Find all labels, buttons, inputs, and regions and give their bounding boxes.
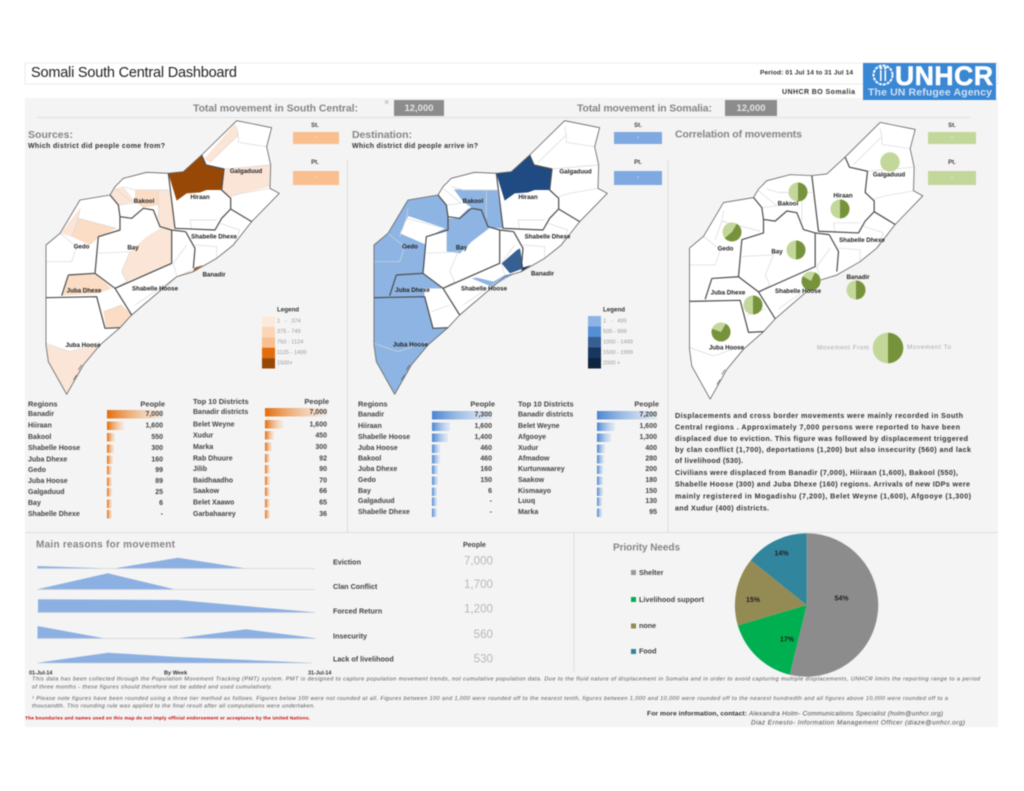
footnotes: thousandth. This rounding rule was applied to the final result after all computations were undertaken. [32, 704, 315, 710]
table: destination districts: Afgooye [518, 434, 546, 441]
table: source districts: 1,600 [309, 422, 327, 428]
narrative text block: of livelihood (530). [675, 456, 743, 465]
table: destination regions: - [490, 509, 493, 516]
table: source regions: 6 [159, 500, 163, 507]
sources St. and Pt. boxes: Pt. [311, 160, 319, 166]
table: destination districts: Xudur [518, 445, 538, 452]
sources St. and Pt. boxes [293, 123, 339, 185]
sources map labels: Shabelle Dhexe [191, 234, 237, 240]
priority needs pie chart: 54% [834, 596, 849, 602]
destination legend [588, 306, 633, 368]
destination heading: Destination: [352, 129, 412, 141]
destination map labels [393, 168, 592, 348]
sources map labels: Juba Dhexe [67, 288, 102, 294]
table: destination districts: 400 [645, 445, 657, 452]
sparkline areas [37, 558, 317, 663]
destination map labels: Juba Dhexe [395, 287, 430, 294]
table: source regions: Galgaduud [28, 489, 65, 496]
destination map labels: Bay [456, 244, 468, 252]
reason labels and values: Forced Return [333, 606, 382, 616]
destination map labels: Juba Hoose [393, 342, 429, 348]
destination map labels: Gedo [402, 244, 418, 250]
map disclaimer: The boundaries and names used on this map do not imply official endorsement or acceptance by the United Nations. [25, 716, 310, 722]
correlation map labels: Juba Hoose [709, 344, 745, 352]
reasons heading: Main reasons for movement [36, 540, 176, 550]
table: source districts: Banadir districts [193, 409, 248, 416]
contact information: Alexandra Holm- Communications Specialist (holm@unhcr.org) [748, 710, 943, 718]
sparkline axis labels: By Week [164, 670, 188, 676]
contact information [647, 710, 965, 726]
narrative text block: Civilians were displaced from Banadir (7,000), Hiiraan (1,600), Bakool (550), [675, 468, 958, 477]
table: source districts: 7,000 [309, 409, 327, 416]
table: source districts: People [304, 397, 329, 406]
reason labels and values: Insecurity [333, 632, 367, 640]
correlation heading: Correlation of movements [675, 128, 802, 140]
destination legend: Legend [603, 306, 625, 314]
table: source regions: Gedo [28, 467, 46, 474]
table: destination regions: Bay [358, 488, 371, 495]
table: destination districts: 150 [645, 488, 657, 495]
table: source districts: 65 [319, 500, 327, 506]
sources legend: Legend [277, 306, 299, 314]
correlation map labels: Gedo [718, 246, 734, 252]
correlation map [689, 122, 923, 399]
correlation St. and Pt. boxes: Pt. [948, 160, 956, 166]
table: source districts: 450 [315, 432, 327, 440]
table: destination regions: Hiiraan [358, 423, 382, 430]
table: destination districts [518, 400, 659, 517]
priority needs heading: Priority Needs [613, 542, 680, 554]
sources map labels: Hiraan [190, 194, 210, 201]
sources heading: Which district did people come from? [28, 143, 165, 150]
table: source regions: 550 [151, 434, 163, 441]
table: source regions: 89 [155, 478, 163, 485]
reason labels and values: 1,200 [464, 602, 493, 616]
correlation St. and Pt. boxes: St. [948, 123, 956, 129]
table: destination regions: Galgaduud [358, 498, 395, 505]
table: source regions: Bakool [28, 434, 51, 441]
panel: priority needs [613, 533, 878, 677]
sources legend: 1125 - 1499 [277, 350, 306, 356]
sources legend: 1500+ [277, 360, 293, 366]
table: destination regions: 1,600 [474, 423, 492, 430]
table: destination districts: 130 [645, 498, 657, 505]
table: destination regions: Banadir [358, 412, 384, 418]
correlation pies [712, 152, 900, 342]
priority needs legend: Livelihood support [639, 595, 705, 604]
priority needs legend [631, 568, 705, 656]
destination map labels: Galgaduud [559, 168, 592, 176]
correlation pie legend [817, 333, 951, 363]
priority needs pie chart [735, 533, 878, 677]
narrative text block: and Xudur (400) districts. [675, 504, 769, 512]
table: destination regions: - [490, 498, 493, 505]
sources map labels: Bay [127, 244, 139, 252]
table: destination regions: Shabelle Hoose [358, 434, 410, 441]
table: source regions: 300 [151, 445, 163, 452]
table: destination regions: 150 [480, 477, 492, 484]
correlation map labels: Shabelle Dhexe [839, 237, 885, 244]
correlation map labels: Bay [771, 248, 783, 256]
table: source regions [28, 400, 165, 518]
table: source districts: 300 [315, 444, 327, 451]
sources heading: Sources: [28, 129, 73, 141]
destination map labels: Banadir [531, 270, 555, 278]
table: source districts: Jilib [193, 466, 207, 473]
reason labels and values: 1,700 [464, 578, 493, 591]
correlation map labels [709, 172, 905, 352]
UNHCR logo [863, 61, 996, 100]
table: source regions: 25 [155, 489, 163, 496]
panel: sources [28, 121, 339, 518]
sparkline axis labels: 31-Jul-14 [308, 670, 331, 676]
table: destination districts: 1,300 [639, 434, 657, 441]
reason labels and values: People [463, 542, 486, 549]
table: source districts: Rab Dhuure [193, 456, 233, 462]
footnotes [32, 676, 981, 710]
panel: correlation [675, 122, 976, 512]
sources St. and Pt. boxes: - [315, 175, 317, 181]
table: source districts: Xudur [193, 432, 213, 440]
correlation pie legend: Movement To [907, 344, 951, 351]
sources map [46, 121, 279, 394]
table: source districts: Marka [193, 444, 213, 451]
table: destination districts: Marka [518, 509, 538, 516]
period and office [760, 70, 855, 96]
correlation map labels: Hiraan [833, 192, 853, 200]
sources legend: 1 - 374 [277, 318, 301, 324]
table: source districts: 36 [319, 511, 327, 518]
table: source districts: 90 [319, 466, 327, 473]
table: destination regions: Regions [358, 400, 388, 408]
table: destination districts: Afmadow [518, 456, 550, 462]
table: source regions: Shabelle Hoose [28, 445, 80, 452]
table: source districts: Belet Weyne [193, 422, 235, 428]
narrative text block: Displacements and cross border movements were mainly recorded in South [675, 411, 963, 420]
total movement South Central: 12,000 [404, 103, 434, 114]
sources map labels [65, 168, 262, 349]
sources map labels: Galgaduud [230, 168, 262, 175]
destination map [374, 121, 607, 394]
reason labels and values: 530 [474, 652, 493, 666]
table: destination districts: Banadir districts [518, 412, 573, 418]
sources map labels: Banadir [202, 272, 226, 278]
priority needs legend: Food [639, 646, 657, 656]
destination St. and Pt. boxes [614, 123, 662, 185]
table: destination districts: Kurtunwaarey [518, 466, 565, 473]
table: destination regions: 460 [480, 456, 492, 462]
sources legend: 750 - 1124 [277, 340, 303, 346]
destination legend: 1500 - 1999 [603, 350, 633, 356]
reason labels and values [333, 542, 493, 666]
sources map labels: Juba Hoose [65, 342, 101, 349]
table: source districts: Saakow [193, 488, 220, 495]
table: source districts: 70 [319, 478, 327, 484]
destination St. and Pt. boxes: Pt. [634, 160, 642, 166]
table: destination districts: Top 10 Districts [518, 400, 574, 408]
table: destination regions: 460 [480, 445, 492, 452]
table: destination districts: Belet Weyne [518, 423, 560, 430]
narrative text block: by clan conflict (1,700), deportations (1,200) but also insecurity (560) and lack [675, 445, 971, 454]
table: source regions: Hiiraan [28, 422, 52, 430]
total movement South Central: Total movement in South Central: [193, 102, 358, 114]
title bar [25, 63, 998, 84]
destination map labels: Bakool [463, 198, 484, 205]
destination legend: 1000 - 1499 [603, 340, 633, 346]
destination St. and Pt. boxes: St. [634, 123, 642, 129]
reason labels and values: 560 [474, 628, 493, 641]
correlation St. and Pt. boxes: - [951, 135, 953, 141]
dashboard background panel [25, 98, 998, 727]
table: destination districts: 95 [649, 509, 657, 516]
table: source regions: 160 [151, 456, 163, 464]
priority needs pie chart: 15% [746, 597, 761, 604]
table: source regions: Juba Hoose [28, 478, 68, 485]
sources heading [28, 129, 165, 150]
destination legend: 500 - 999 [603, 329, 627, 335]
priority needs legend: Shelter [639, 568, 664, 577]
table: destination districts: Saakow [518, 477, 545, 484]
table: destination regions: 6 [488, 488, 492, 495]
correlation pie legend: Movement From [817, 344, 869, 352]
table: source regions: Juba Dhexe [28, 456, 67, 464]
destination map labels: Hiraan [518, 194, 538, 201]
panel: main reasons for movement [29, 540, 493, 676]
footnotes: ¹ Please note figures have been rounded using a three tier method as follows. Figures below 100 were not rounded at all. Figures between 100 and 1,000 were rounded off to the nearest tenth, figures between 1,000 and 10,000 were rounded off to the nearest hundredth and all figures above 10,000 were rounded off to a [32, 696, 948, 702]
UNHCR logo: The UN Refugee Agency [868, 86, 992, 98]
reason labels and values: 7,000 [464, 554, 493, 568]
table: source districts: Top 10 Districts [193, 397, 249, 406]
correlation map labels: Bakool [778, 200, 799, 208]
destination legend: 1 - 499 [603, 318, 627, 324]
table: source districts [193, 397, 329, 518]
table: source regions: 99 [155, 467, 163, 474]
correlation map labels: Shabelle Hoose [775, 288, 822, 295]
total movement Somalia: Total movement in Somalia: [577, 102, 712, 114]
narrative text block: displaced due to eviction. This figure was followed by displacement triggered [675, 434, 968, 443]
total movement Somalia [577, 100, 777, 116]
footnotes: of three months - these figures should therefore not be added and used cumulatively. [32, 684, 272, 690]
table: destination districts: 7,200 [639, 412, 657, 418]
table: source districts: 66 [319, 488, 327, 495]
table: source regions: - [161, 511, 164, 518]
table: destination regions: Gedo [358, 477, 376, 484]
table: destination regions: Shabelle Dhexe [358, 509, 410, 516]
table: destination districts: 200 [645, 466, 657, 473]
period and office: UNHCR BO Somalia [782, 89, 855, 96]
reason labels and values: Eviction [333, 558, 361, 566]
table: destination districts: Luuq [518, 498, 535, 505]
table: destination districts: 1,600 [639, 423, 657, 430]
sources map labels: Gedo [74, 244, 90, 250]
destination heading [352, 129, 478, 150]
sources St. and Pt. boxes: - [315, 135, 317, 141]
sources map labels: Shabelle Hoose [132, 286, 179, 292]
contact information: Diaz Ernesto- Information Management Officer (diaze@unhcr.org) [751, 720, 965, 726]
table: destination regions: 160 [480, 466, 492, 473]
table: source regions: 1,600 [145, 422, 163, 430]
table: source districts: Belet Xaawo [193, 500, 234, 506]
footnotes: This data has been collected through the Population Movement Tracking (PMT) system. PMT is designed to capture population movement trends, not cumulative population data. Due to the fluid nature of displacement in Somalia and in order to avoid capturing multiple displacements, UNHCR limits the reporting range to a period [32, 676, 981, 682]
table: source districts: 92 [319, 456, 327, 462]
table: destination regions: Juba Dhexe [358, 466, 397, 473]
correlation map labels: Banadir [846, 274, 870, 281]
narrative text block: mainly registered in Mogadishu (7,200), Belet Weyne (1,600), Afgooye (1,300) [675, 492, 972, 500]
correlation St. and Pt. boxes: - [951, 175, 953, 181]
narrative text block: Central regions . Approximately 7,000 persons were reported to have been [675, 422, 960, 432]
table: source districts: Garbahaarey [193, 511, 236, 518]
sources legend [262, 306, 306, 368]
total movement South Central [193, 100, 444, 116]
correlation map labels: Galgaduud [873, 172, 905, 178]
correlation St. and Pt. boxes [928, 123, 976, 185]
destination map labels: Shabelle Hoose [461, 286, 508, 292]
UNHCR logo: UNHCR [895, 61, 993, 91]
total movement Somalia: 12,000 [736, 103, 766, 114]
narrative text block: Shabelle Hoose (300) and Juba Dhexe (160) regions. Arrivals of new IDPs were [675, 480, 970, 488]
sparkline axis labels: 01-Jul-14 [29, 670, 52, 676]
table: destination districts: Kismaayo [518, 488, 551, 495]
destination St. and Pt. boxes: - [637, 135, 639, 141]
reason labels and values: Clan Conflict [333, 582, 378, 591]
title: Somali South Central Dashboard [31, 65, 237, 81]
destination St. and Pt. boxes: - [637, 175, 639, 181]
table: destination regions: 7,300 [474, 412, 492, 418]
table: source regions: Regions [28, 400, 58, 408]
table: destination regions [358, 400, 495, 517]
panel: destination [352, 121, 662, 517]
sparkline axis labels [29, 670, 331, 676]
destination legend: 2000 + [603, 360, 620, 366]
table: destination districts: 280 [645, 456, 657, 462]
table: destination regions: 1,400 [474, 434, 492, 441]
table: destination regions: People [470, 400, 495, 408]
sources St. and Pt. boxes: St. [311, 123, 319, 129]
table: source regions: Bay [28, 500, 41, 507]
reason labels and values: Lack of livelihood [333, 654, 394, 664]
contact information: For more information, contact: [647, 710, 747, 718]
priority needs pie chart: 17% [780, 636, 795, 644]
table: destination regions: Bakool [358, 456, 381, 462]
table: destination districts: People [634, 400, 659, 408]
sources legend: 375 - 749 [277, 329, 301, 335]
destination map labels: Shabelle Dhexe [525, 234, 571, 240]
table: destination regions: Juba Hoose [358, 445, 398, 452]
sources map labels: Bakool [134, 198, 155, 205]
table: destination districts: 180 [645, 477, 657, 484]
table: source regions: Banadir [28, 411, 54, 418]
table: source regions: Shabelle Dhexe [28, 511, 80, 518]
destination heading: Which district did people arrive in? [352, 143, 478, 150]
table: source regions: 7,000 [145, 411, 163, 418]
total movement South Central: n [385, 100, 388, 106]
priority needs pie chart: 14% [774, 550, 789, 558]
table: source regions: People [140, 400, 165, 408]
priority needs legend: none [639, 621, 656, 630]
narrative text block [675, 411, 972, 512]
correlation map labels: Juba Dhexe [711, 290, 746, 296]
period and office: Period: 01 Jul 14 to 31 Jul 14 [760, 70, 853, 76]
table: source districts: Baidhaadho [193, 478, 233, 484]
